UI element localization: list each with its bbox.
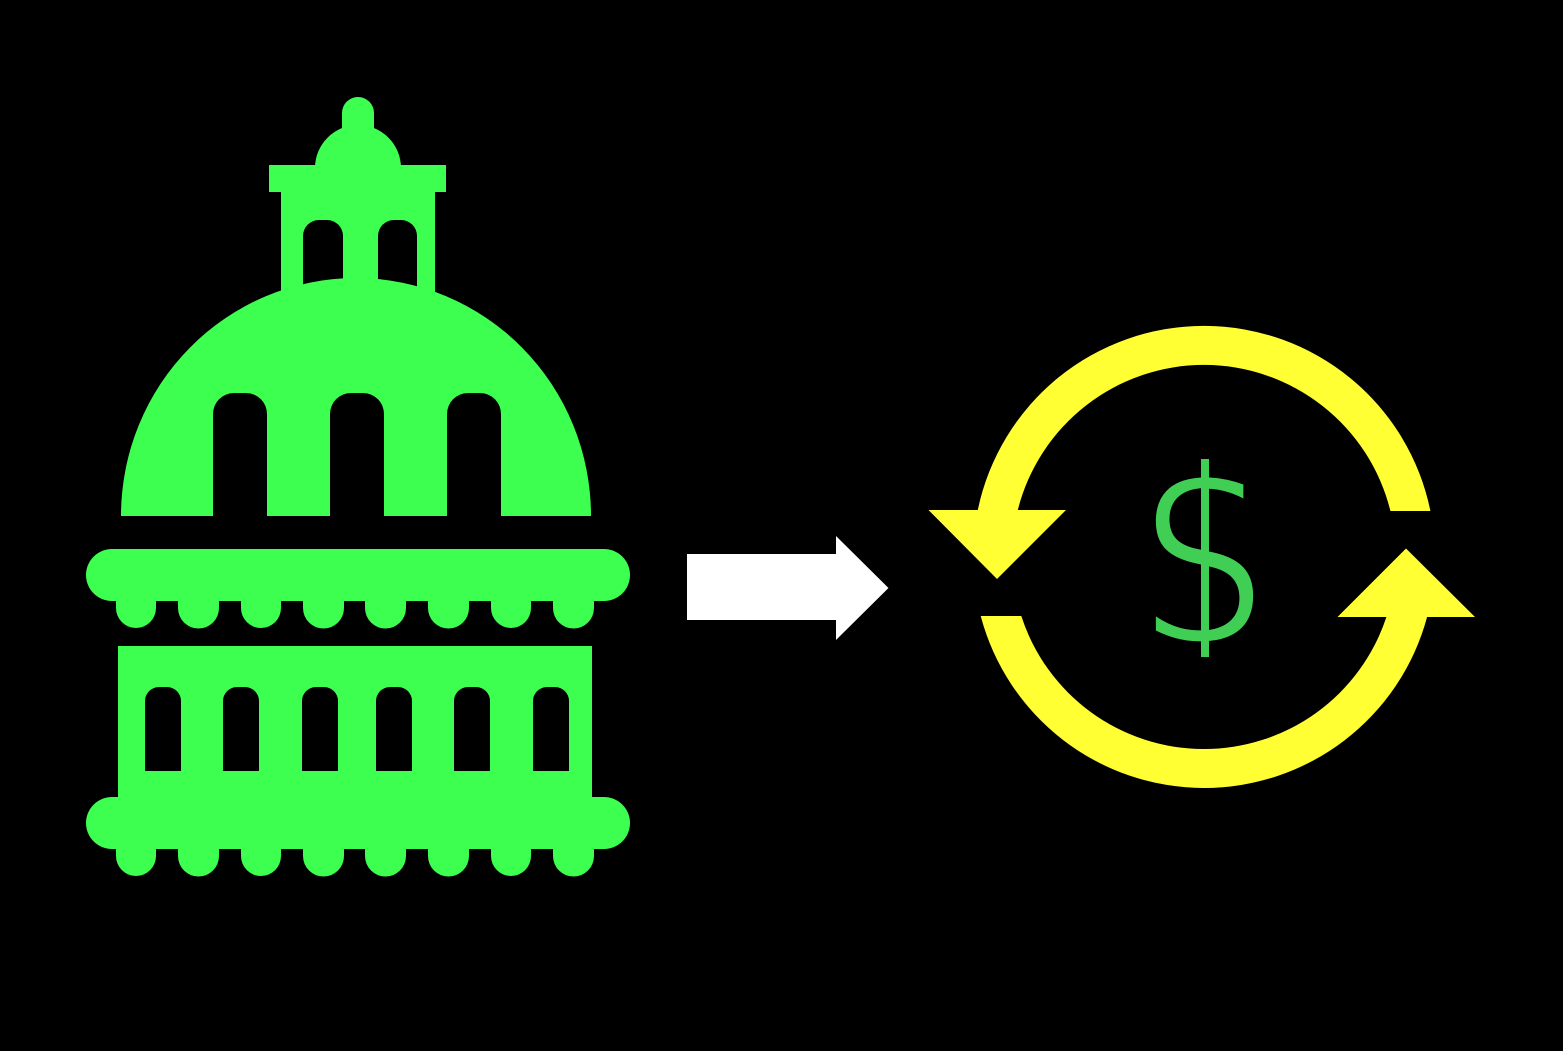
lantern small dome (315, 125, 401, 168)
wall windows (145, 687, 569, 771)
dome arches (213, 393, 501, 517)
upper band with scallops (86, 549, 630, 628)
cycle arrow: bottom arc (981, 548, 1475, 788)
icon: money cycle (928, 326, 1475, 788)
dollar sign (1156, 459, 1254, 657)
main dome (121, 278, 591, 516)
arrow: white right arrow (687, 536, 888, 640)
lower band with scallops (86, 797, 630, 876)
lantern body (281, 190, 435, 305)
dollar sign: $ (1135, 400, 1274, 708)
lantern cornice (269, 165, 446, 192)
lantern finial (342, 97, 374, 135)
cycle arrow: top arc (928, 326, 1430, 579)
lower wall (118, 646, 592, 806)
lantern windows (303, 220, 417, 300)
icon: capitol building (86, 97, 630, 876)
